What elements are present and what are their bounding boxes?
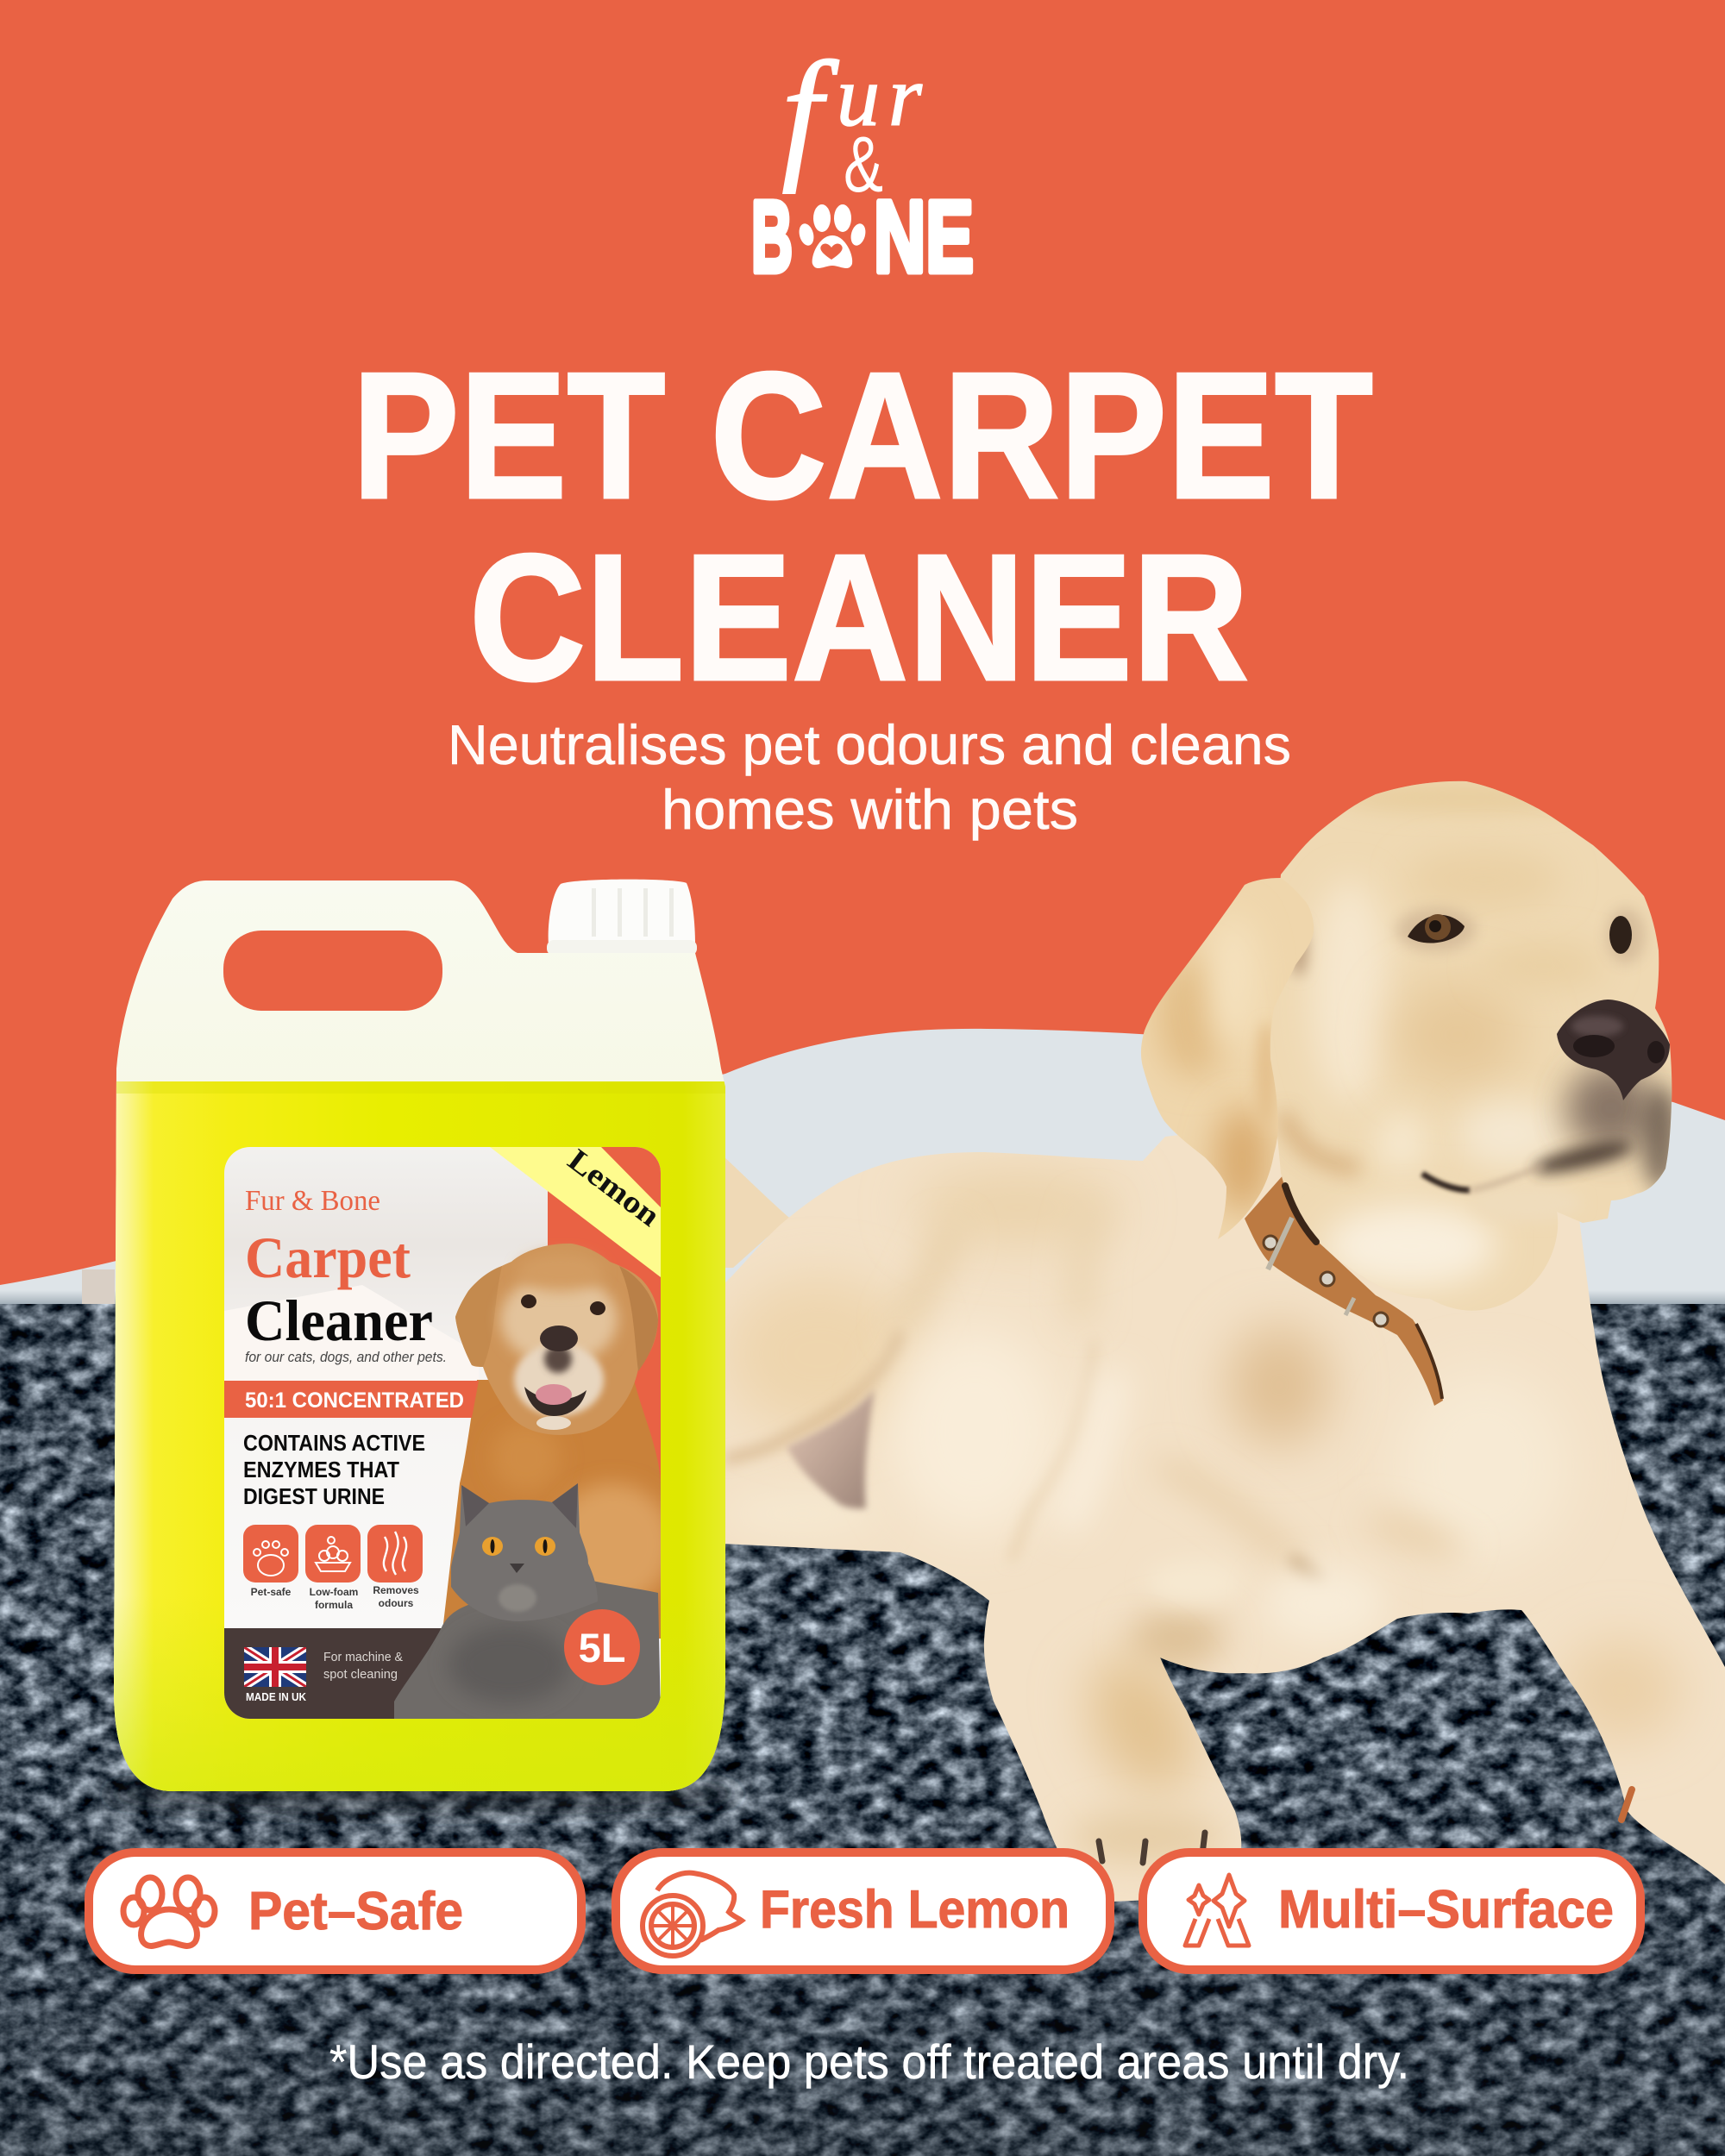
pill: pet-safe: [89, 1852, 581, 1970]
label: icon captions: formula: [315, 1599, 353, 1611]
jug: handle opening: [223, 931, 442, 1011]
product: cleaner jug: [104, 880, 742, 1813]
jug: cast shadow: [104, 1775, 742, 1813]
label: 5L badge: 5L: [579, 1625, 625, 1670]
label: icon captions: Removes: [373, 1584, 419, 1596]
label: lemon flavour text: Lemon: [561, 1142, 667, 1233]
label: usage note: spot cleaning: [323, 1667, 398, 1682]
dog: right eye: [1609, 916, 1632, 954]
jug: cap: [547, 880, 697, 956]
icon: lemon: [643, 1873, 742, 1956]
label: icon captions: odours: [379, 1597, 414, 1609]
wave: pale wall band: [0, 1029, 1725, 1319]
label: union flag: [244, 1647, 306, 1687]
dog: labrador puppy: [723, 781, 1725, 1902]
dog: claws: [1099, 1789, 1632, 1863]
label: red corner panel: [548, 1147, 661, 1595]
label: odour icon: [367, 1525, 423, 1583]
label: carpet pattern: [224, 1285, 479, 1381]
pill: fresh lemon: [616, 1852, 1110, 1970]
jug: product label: [224, 1142, 673, 1719]
label: lemon ribbon: [490, 1147, 661, 1277]
label: grey cat: [394, 1483, 661, 1719]
label: enzyme claim: CONTAINS ACTIVE: [243, 1430, 425, 1456]
label: icon captions: Low-foam: [310, 1586, 358, 1598]
logo: paw as letter O: [797, 204, 868, 268]
label: tagline: for our cats, dogs, and other pets.: [245, 1349, 447, 1365]
dog: ear: [1141, 878, 1314, 1239]
pill label: Multi–Surface: [1278, 1880, 1614, 1940]
label: enzyme claim: ENZYMES THAT: [243, 1457, 399, 1482]
dog: nose: [1557, 1000, 1670, 1100]
label: usage note: For machine &: [323, 1650, 403, 1664]
subtitle: homes with pets: [662, 778, 1078, 841]
dog: left eye: [1408, 914, 1465, 943]
label: background: [224, 1147, 661, 1719]
label: concentrate text: 50:1 CONCENTRATED: [245, 1388, 464, 1413]
label: icon captions: Pet-safe: [251, 1586, 292, 1598]
label: golden retriever: [442, 1244, 673, 1639]
pill label: Pet–Safe: [248, 1882, 463, 1941]
pill: multi-surface: [1143, 1852, 1640, 1970]
carpet: [0, 1304, 1725, 2156]
subtitle: Neutralises pet odours and cleans: [448, 713, 1291, 776]
jug: container body: [104, 881, 733, 1797]
logo: letters N E: NE: [874, 180, 974, 294]
title: PET CARPET: [352, 335, 1373, 536]
dog: head: [1141, 781, 1679, 1311]
title: CLEANER: [469, 517, 1249, 718]
label: icon captions: [251, 1584, 419, 1611]
subtitle: [448, 713, 1291, 841]
logo: Fur & Bone: [751, 32, 974, 294]
label: low-foam icon: [305, 1525, 361, 1583]
label: carpet title: Carpet: [245, 1225, 411, 1290]
label: 5L badge: [564, 1609, 640, 1685]
icon: paw: [123, 1877, 215, 1946]
label: pet-safe icon: [243, 1525, 298, 1583]
logo: fur script: f: [781, 32, 839, 194]
title: [352, 335, 1373, 718]
dog: belly skin: [787, 1389, 875, 1508]
label: made in uk: MADE IN UK: [246, 1690, 307, 1703]
label: usage note: [323, 1650, 403, 1682]
jug: yellow liquid: [104, 1081, 733, 1797]
label: dark footer bar: [224, 1628, 448, 1719]
pill label: Fresh Lemon: [760, 1880, 1070, 1940]
label: cleaner title: Cleaner: [245, 1288, 433, 1353]
logo: ampersand: &: [844, 121, 883, 209]
label: enzyme claim: DIGEST URINE: [243, 1483, 385, 1509]
dog: body: [723, 1121, 1725, 1902]
logo: fur script: ur: [837, 48, 931, 144]
label: brand name: Fur & Bone: [245, 1185, 380, 1217]
icon: sparkles over surface: [1185, 1875, 1249, 1946]
label: red banner: [224, 1381, 479, 1418]
logo: letter B: B: [751, 180, 793, 294]
dog: hind paw: [723, 1156, 789, 1268]
label: enzyme claim: [243, 1430, 425, 1509]
dog: collar: [1245, 1173, 1443, 1406]
footnote: *Use as directed. Keep pets off treated areas until dry.: [329, 2034, 1409, 2089]
dog: dark collar gap: [1285, 1186, 1316, 1242]
